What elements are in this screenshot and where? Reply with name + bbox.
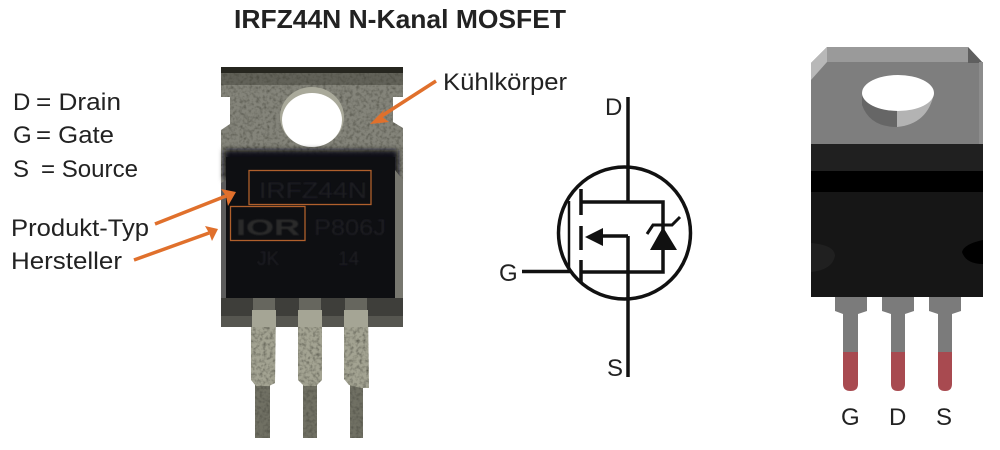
highlight box: manufacturer: [230, 206, 305, 240]
photo: black body: [226, 157, 395, 299]
legend: pin abbreviations: D: [13, 89, 30, 116]
illustration: red lead tips: [843, 352, 952, 391]
photo: heat sink tab: [221, 67, 403, 305]
symbol: body arrow: [585, 228, 603, 246]
arrow: heat sink: [370, 81, 436, 124]
legend: pin abbreviations: = Source: [41, 156, 138, 183]
illustration: black body: [811, 144, 983, 297]
symbol: wiring: [522, 97, 663, 377]
illustration: black stripe: [811, 171, 983, 192]
label: Kühlkörper: Kühlkörper: [443, 69, 567, 96]
photo: printed markings: [236, 178, 386, 270]
photo: printed markings: JK: [257, 249, 280, 270]
illustration: pin labels: D: [889, 404, 906, 431]
photo: lower lip: [221, 298, 403, 327]
symbol: labels: [499, 94, 623, 382]
package illustration: [811, 47, 983, 431]
photo: printed markings: IOR: [236, 215, 300, 240]
arrow: product type: [155, 189, 236, 224]
photo: body shadow: [224, 150, 398, 180]
highlight box: product type: [249, 170, 371, 204]
illustration: lead wide parts: [835, 297, 961, 352]
photo: printed markings: 14: [338, 249, 360, 270]
illustration: pin labels: S: [936, 404, 952, 431]
illustration: pin labels: [841, 404, 952, 431]
symbol: channel segments: [579, 189, 583, 283]
legend: pin abbreviations: [13, 89, 138, 183]
photo: mounting hole: [280, 87, 344, 147]
photo: printed markings: P806J: [314, 215, 386, 240]
symbol: labels: D: [605, 94, 622, 121]
legend: pin abbreviations: = Gate: [36, 122, 114, 149]
legend: pin abbreviations: G: [13, 122, 32, 149]
symbol: package circle: [558, 167, 690, 299]
symbol: zener diode: [647, 217, 680, 250]
illustration: pin labels: G: [841, 404, 860, 431]
illustration: side notches: [811, 243, 835, 272]
illustration: metal tab: [811, 47, 983, 144]
symbol: labels: G: [499, 260, 518, 287]
photo: metal leads: [251, 308, 369, 438]
title: IRFZ44N N-Kanal MOSFET: [234, 4, 566, 34]
circuit symbol: [499, 94, 690, 382]
label: Produkt-Typ: Produkt-Typ: [11, 215, 149, 242]
photo of transistor: [221, 67, 403, 438]
photo: printed markings: IRFZ44N: [259, 178, 367, 203]
label: Hersteller: Hersteller: [11, 248, 122, 275]
illustration: hole: [862, 93, 897, 127]
legend: pin abbreviations: = Drain: [36, 89, 121, 116]
arrow: manufacturer: [134, 226, 218, 260]
legend: pin abbreviations: S: [13, 156, 29, 183]
symbol: labels: S: [607, 355, 623, 382]
